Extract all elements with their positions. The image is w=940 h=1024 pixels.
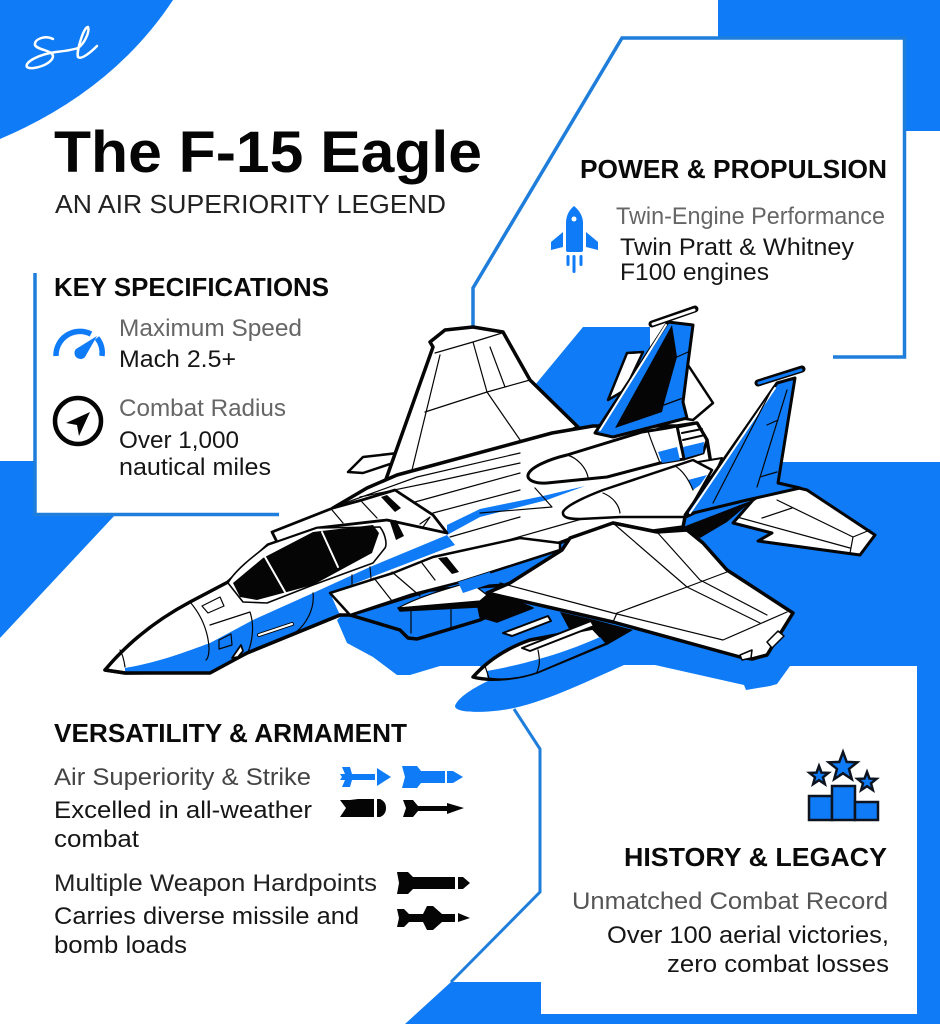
near tail: [685, 369, 802, 515]
fuselage markings: [381, 495, 493, 593]
text: weapon hardpoints: Multiple Weapon Hardpoints: [54, 870, 377, 897]
stabilizer: [683, 483, 875, 555]
far rudder and brake: [608, 352, 713, 420]
logo signature: [27, 27, 97, 68]
text: twin-engine performance: Twin-Engine Performance: [616, 203, 885, 230]
text: combat record: zero combat losses: [667, 951, 889, 978]
panel: key specifications: [35, 272, 329, 514]
text: air superiority: combat: [54, 826, 139, 853]
text: combat radius: nautical miles: [119, 454, 271, 481]
icons: missiles: [397, 872, 470, 930]
far wing: [348, 327, 578, 490]
panel: power and propulsion: [473, 38, 904, 357]
cockpit canopy: [228, 525, 386, 603]
text: combat record: Over 100 aerial victories,: [607, 922, 889, 949]
panel: key specifications: KEY SPECIFICATIONS: [54, 272, 329, 302]
subtitle: AN AIR SUPERIORITY LEGEND: [55, 189, 446, 219]
near wing: [487, 523, 793, 660]
illustration: F-15 jet: [105, 309, 875, 679]
icon: speedometer: [56, 331, 102, 359]
text: combat radius: [119, 395, 286, 481]
panel: versatility and armament: VERSATILITY & ARMAMENT: [54, 718, 407, 748]
panel: history and legacy: [572, 752, 889, 978]
upper nacelle: [528, 426, 684, 483]
icons: black munitions: [340, 799, 464, 817]
text: weapon hardpoints: Carries diverse missile and: [54, 903, 359, 930]
lower nacelle: [563, 460, 712, 519]
text: combat radius: Over 1,000: [119, 427, 239, 454]
title: The F-15 Eagle: [54, 120, 482, 185]
text: twin-engine performance: F100 engines: [620, 259, 769, 286]
icons: blue munitions: [340, 766, 463, 788]
text: combat record: Unmatched Combat Record: [572, 888, 888, 915]
text: air superiority: Excelled in all-weather: [54, 797, 312, 824]
text: twin-engine performance: [616, 203, 885, 286]
intake ramp: [330, 538, 560, 615]
text: combat radius: Combat Radius: [119, 395, 286, 422]
main body: [105, 423, 712, 673]
icon: rocket: [551, 206, 598, 273]
text: twin-engine performance: Twin Pratt & Whitney: [620, 234, 854, 261]
text: weapon hardpoints: [54, 870, 377, 959]
text: air superiority: Air Superiority & Strike: [54, 764, 311, 791]
far tail: [595, 309, 695, 437]
icon: podium with stars: [809, 752, 878, 820]
text: maximum speed: [119, 315, 302, 373]
external tank and missiles: [473, 612, 633, 679]
panel: history and legacy: HISTORY & LEGACY: [624, 842, 887, 872]
panel: power and propulsion: POWER & PROPULSION: [580, 154, 887, 184]
engine nozzle: [677, 423, 722, 480]
text: air superiority: [54, 764, 312, 853]
text: weapon hardpoints: bomb loads: [54, 932, 187, 959]
icon: compass: [55, 398, 101, 444]
panel: versatility and armament: [54, 718, 470, 959]
panel: history and legacy line: [451, 709, 540, 982]
text: maximum speed: Mach 2.5+: [119, 346, 236, 373]
canopy fairing: [272, 490, 447, 542]
text: maximum speed: Maximum Speed: [119, 315, 302, 342]
underside fairing and store: [350, 582, 533, 639]
text: combat record: [572, 888, 889, 978]
